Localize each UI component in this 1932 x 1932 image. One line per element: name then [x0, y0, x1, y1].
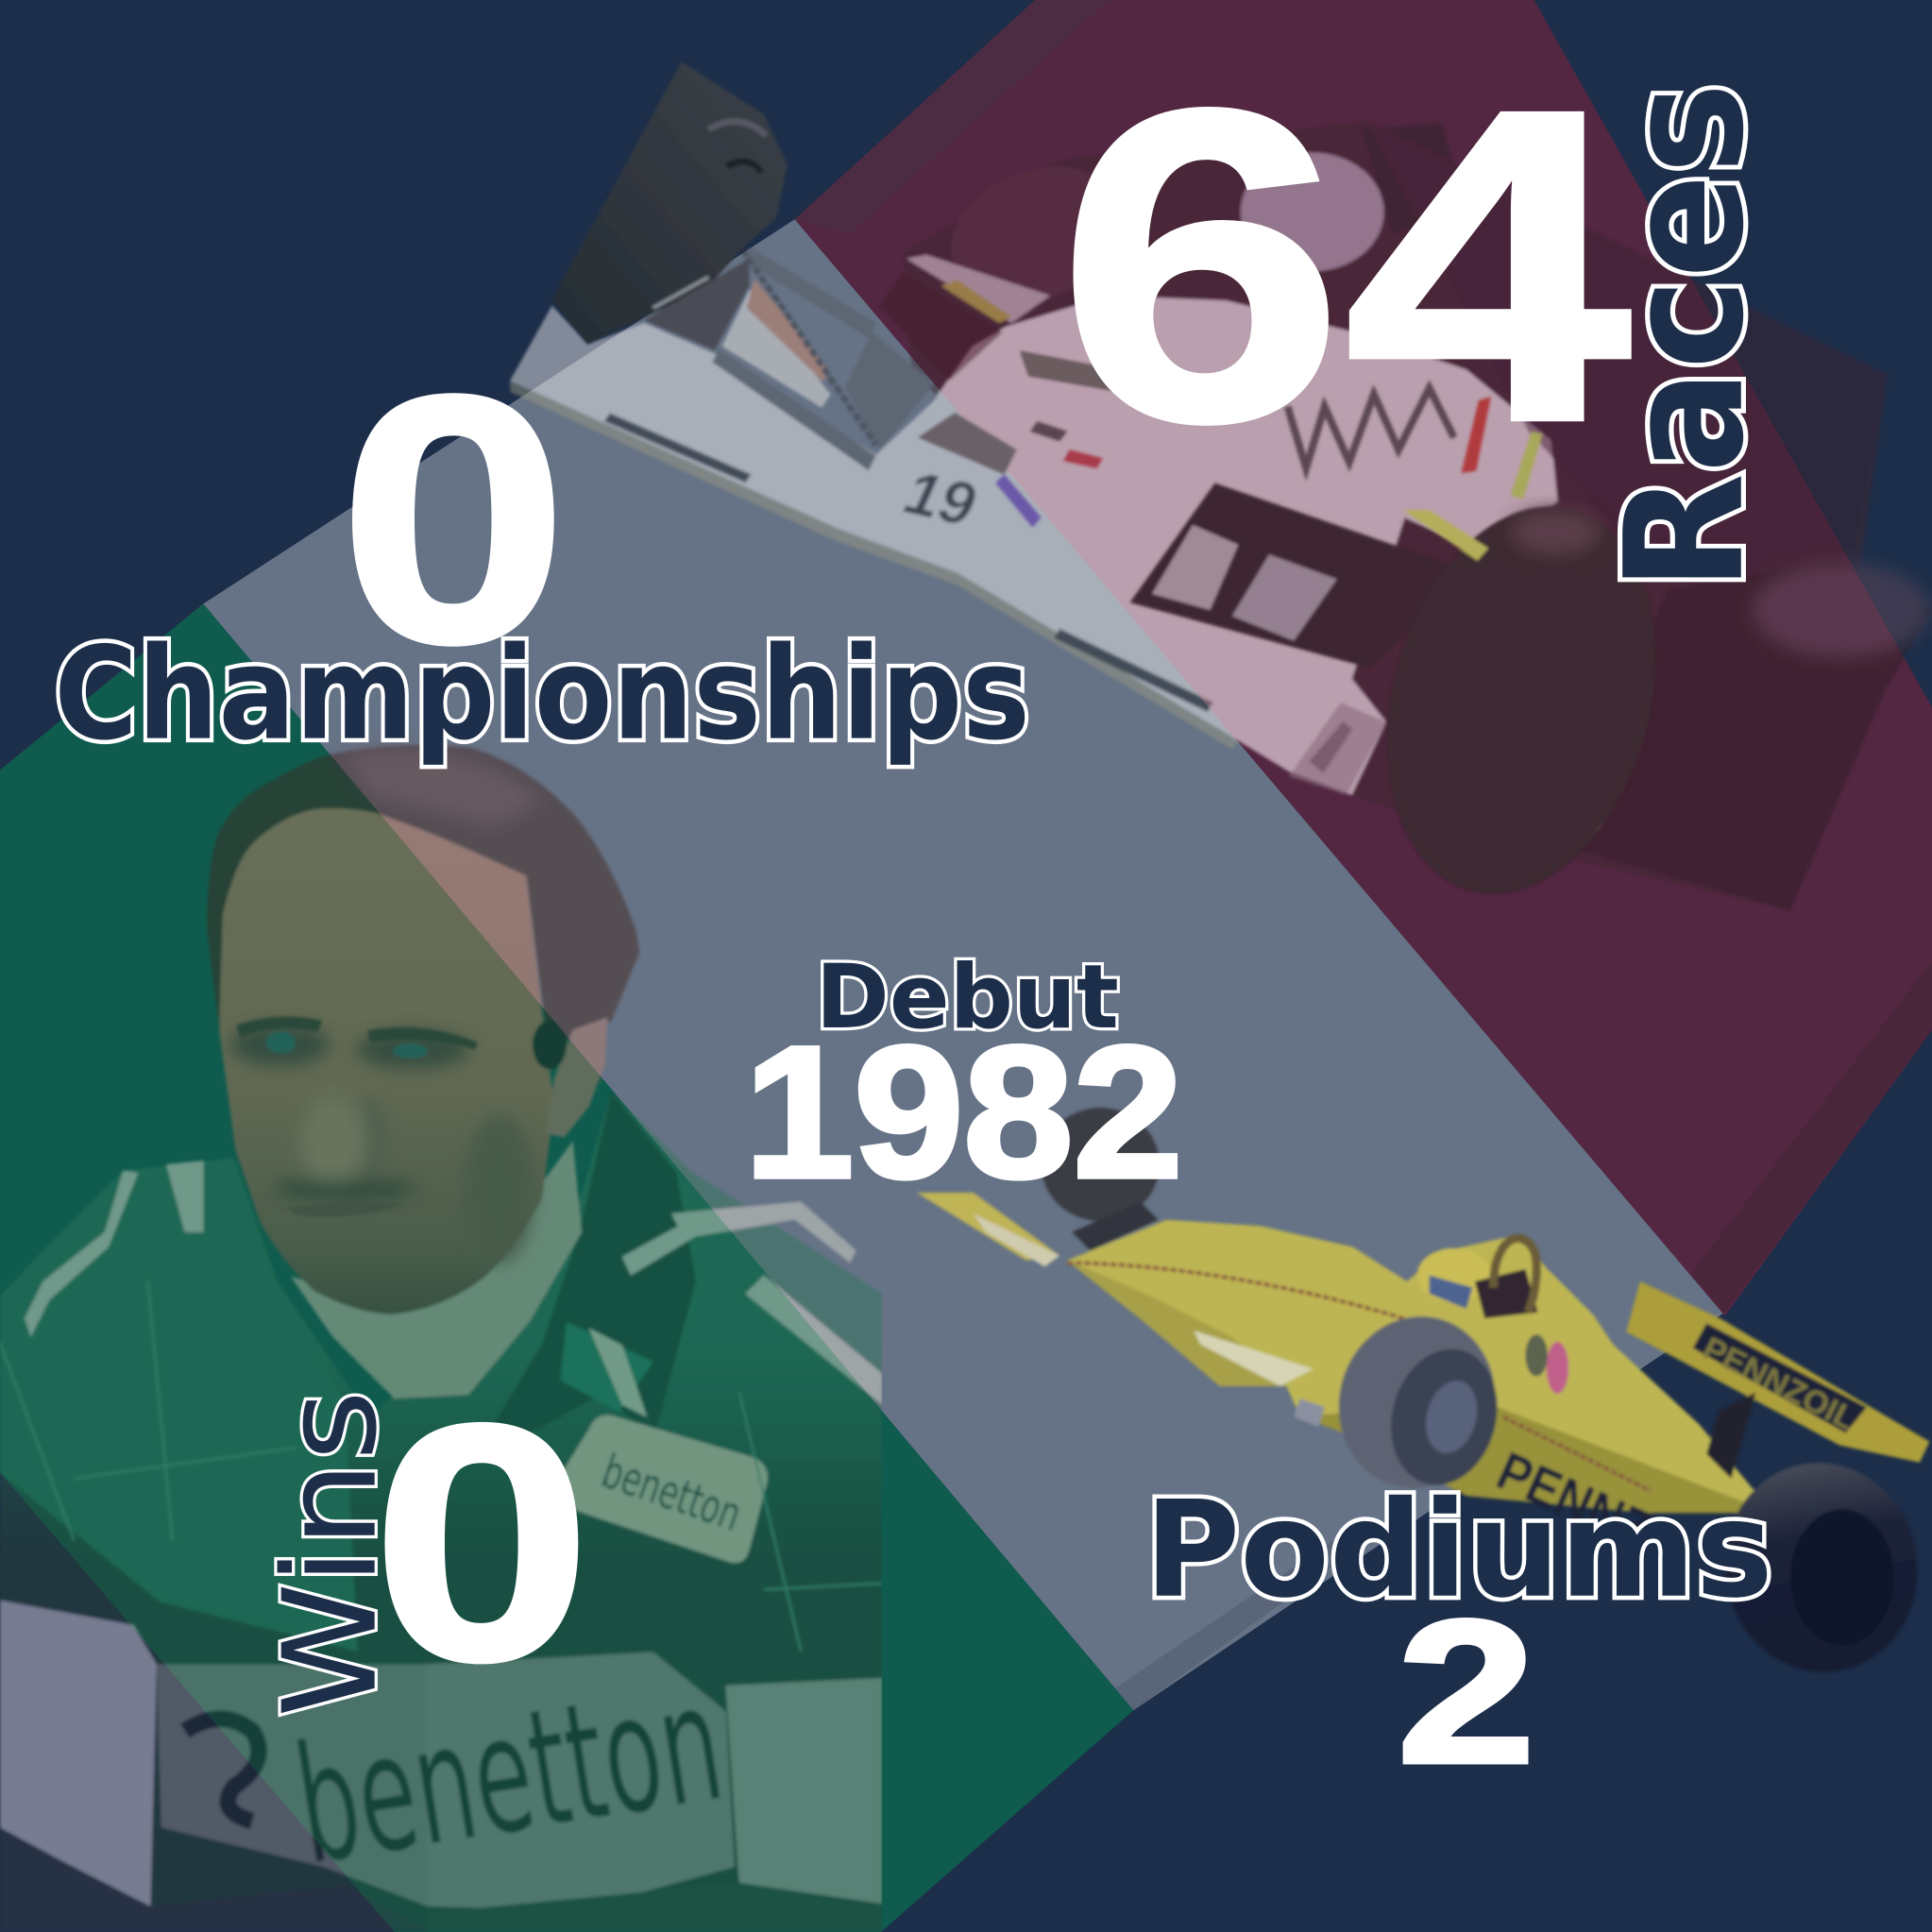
stat: wins	[257, 1356, 591, 1730]
patch: benetton	[554, 1415, 768, 1563]
value: 2: 2	[1398, 1578, 1535, 1805]
vent slots	[1309, 720, 1353, 773]
underside strip	[510, 381, 1238, 749]
number 8 decal	[1547, 1342, 1568, 1394]
band centre panel	[425, 1652, 735, 1910]
strut	[1072, 1201, 1159, 1250]
hub	[1790, 1509, 1894, 1645]
roundel	[1525, 1334, 1548, 1377]
main body	[1067, 1220, 1773, 1513]
yellow plate	[941, 280, 1011, 323]
face shading	[230, 1024, 534, 1263]
value: 64: 64	[1058, 18, 1635, 514]
face	[219, 808, 554, 1314]
bead	[653, 278, 708, 308]
stat: championships	[54, 323, 1030, 770]
logo swirl	[185, 1719, 259, 1822]
wheel top sheen	[1511, 510, 1600, 554]
cockpit logo	[1020, 351, 1121, 392]
white bodywork	[510, 296, 1557, 795]
number: 19	[899, 457, 981, 539]
flag decal	[1294, 1398, 1325, 1427]
value: 0: 0	[339, 323, 568, 716]
band: maroon tonal strips	[795, 0, 1932, 1710]
helmet stripes	[1362, 123, 1466, 234]
suit	[0, 1092, 882, 1932]
hair highlight	[345, 752, 542, 825]
ear	[546, 1018, 607, 1137]
wing strut	[1706, 1392, 1755, 1479]
car details on red stripe	[918, 351, 1697, 924]
rear vent	[1289, 703, 1386, 795]
helmet	[1241, 153, 1383, 271]
top front tyre	[1042, 1108, 1160, 1221]
side struts	[1130, 483, 1471, 668]
label: Championships: Championships	[54, 620, 1030, 770]
nose underside shade	[1067, 1261, 1286, 1386]
right sleeve	[726, 1678, 882, 1904]
label: Podiums: Podiums	[1144, 1473, 1773, 1628]
label: Debut: Debut	[816, 946, 1119, 1049]
decals	[1462, 397, 1491, 473]
pink top plate	[907, 255, 1050, 323]
bright left sleeve panel	[0, 1413, 358, 1652]
rear right dark wing	[1367, 121, 1888, 603]
visor	[1430, 1276, 1472, 1309]
rear wheels	[1347, 476, 1697, 924]
value: 1982: 1982	[744, 1008, 1183, 1217]
side lettering: PENNZ	[1488, 1441, 1659, 1561]
wheel highlight	[1584, 813, 1601, 830]
roll hoop	[1493, 1238, 1536, 1313]
lower-left dark	[0, 1827, 432, 1932]
upright	[644, 259, 749, 350]
rear wing lettering	[1693, 1323, 1867, 1433]
brows and eyes	[235, 1016, 478, 1217]
gray arms	[712, 246, 934, 470]
stat: podiums	[1144, 1473, 1773, 1805]
stat: debut	[744, 946, 1183, 1217]
window light panel	[722, 290, 830, 408]
lower body shade	[1300, 1405, 1773, 1513]
window gap	[780, 280, 865, 387]
wing pale edge	[974, 1213, 1059, 1266]
sidepod inlet	[1194, 1330, 1313, 1386]
collar flag patch	[561, 1322, 653, 1412]
rear wing	[1626, 1281, 1929, 1463]
strut panes	[1152, 525, 1238, 610]
patch: benetton: benetton	[595, 1444, 748, 1542]
photo: driver portrait	[0, 745, 882, 1932]
front tyre	[552, 61, 788, 350]
stat: races	[1058, 18, 1780, 591]
chest band	[157, 1652, 735, 1910]
helmet	[1417, 1248, 1491, 1302]
photo: white race car	[510, 121, 1932, 924]
dark-red block	[880, 272, 1003, 381]
rear wheel	[1708, 1448, 1932, 1687]
label: Races: Races	[1590, 82, 1780, 591]
value: 0: 0	[372, 1356, 591, 1730]
pirelli strips	[603, 413, 1213, 712]
car dark body	[903, 121, 1888, 910]
sideburn	[533, 1020, 567, 1070]
nose wing	[917, 1193, 1059, 1261]
shoulder stripes	[25, 1161, 882, 1405]
label: Wins: Wins	[257, 1390, 406, 1718]
rear wheel overlap	[1347, 476, 1697, 924]
tyre rings	[708, 122, 767, 173]
body scribbles	[1288, 388, 1454, 468]
front wheel	[1320, 1298, 1515, 1505]
suspension rod	[742, 249, 876, 445]
left sleeve	[0, 1601, 157, 1907]
zip and seam	[0, 1281, 882, 1651]
chest text: benetton: benetton	[284, 1647, 734, 1901]
dark collar panel	[495, 1093, 696, 1432]
bottom band	[432, 1883, 882, 1932]
body stripe	[1067, 1263, 1651, 1491]
wing text: PENNZOIL	[1697, 1330, 1861, 1437]
top rear tyre	[932, 144, 1143, 325]
car body highlight on red stripe	[876, 296, 1557, 795]
photo: yellow race car	[917, 1108, 1932, 1687]
neck	[291, 1141, 582, 1398]
hair	[207, 745, 639, 1047]
cockpit dark	[1475, 1269, 1537, 1318]
